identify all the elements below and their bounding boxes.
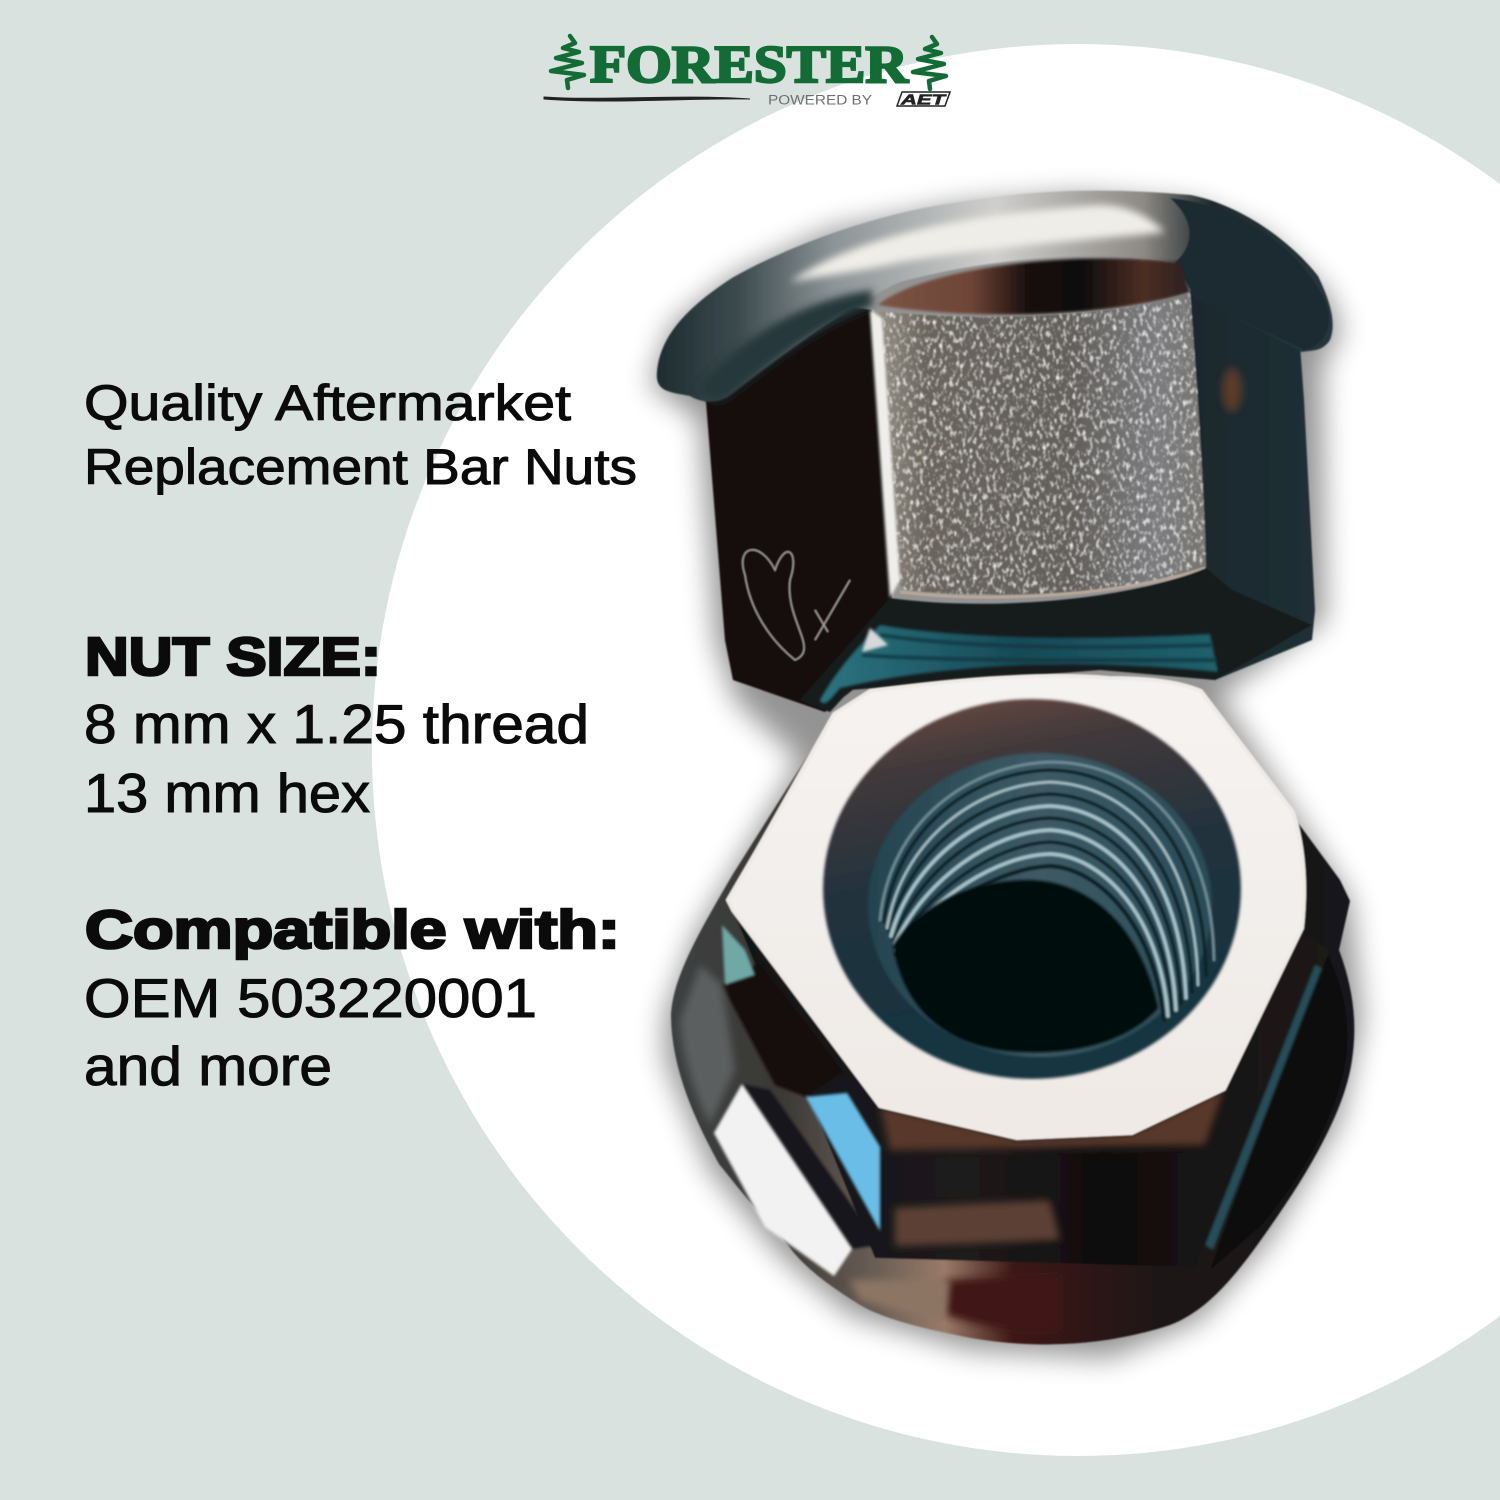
- bottom nut flange brown spot: [945, 1275, 1060, 1331]
- powered by: POWERED BY: [768, 92, 872, 108]
- text block: compatibility: [84, 900, 620, 1097]
- top nut right body: [1100, 290, 1315, 680]
- bottom nut threads: [880, 762, 1214, 1020]
- text block: nut size: 13 mm hex: [84, 762, 370, 824]
- bottom nut silver flange left: [680, 965, 735, 1125]
- top nut inner band under flange: [878, 259, 1190, 314]
- top nut flange dark right: [1170, 198, 1329, 350]
- top nut small highlight: [862, 628, 888, 652]
- top nut threaded throat: [820, 625, 1218, 703]
- bottom nut right teal edge: [1205, 965, 1322, 1250]
- text block: nut size: [84, 627, 589, 824]
- product photo: two flange nuts: [650, 191, 1362, 1358]
- bottom nut flange tan spot: [850, 1280, 950, 1320]
- text block: product heading: [84, 375, 637, 495]
- top nut lower chamfer: [800, 568, 1312, 712]
- logo swoosh underline: [544, 97, 750, 101]
- bottom nut brown lower reflection: [895, 1200, 1060, 1246]
- top nut flange rim: [657, 191, 1333, 402]
- bottom nut flange: [671, 691, 1354, 1344]
- top nut rust spot: [1222, 368, 1242, 412]
- bottom nut right flange dark: [1210, 950, 1348, 1270]
- top nut face lower edge line: [900, 568, 1205, 597]
- drop shadow: [650, 195, 1362, 1358]
- top nut flange highlight: [790, 205, 1165, 282]
- AET badge: AET: [900, 92, 948, 108]
- text block: compatibility: OEM 503220001: [84, 967, 537, 1029]
- icon: right pine tree: [913, 37, 946, 89]
- bottom nut black through-hole: [893, 880, 1158, 1052]
- bottom nut lower hex skirt: [733, 910, 1330, 1267]
- text block: product heading: Replacement Bar Nuts: [84, 439, 637, 495]
- text block: nut size: NUT SIZE:: [85, 627, 381, 687]
- top nut: [657, 191, 1333, 712]
- text block: compatibility: and more: [84, 1035, 332, 1097]
- logo: Forester: [544, 36, 950, 108]
- logo wordmark: FORESTER: [590, 36, 909, 94]
- white circle background: [372, 44, 1500, 1456]
- text block: product heading: Quality Aftermarket: [84, 375, 571, 431]
- top nut scratch marks: [743, 550, 850, 660]
- top nut left dark face: [660, 300, 892, 712]
- bottom nut white flange stripe: [714, 1084, 852, 1276]
- text block: nut size: 8 mm x 1.25 thread: [84, 693, 589, 755]
- bottom nut bright hex face: [728, 676, 1304, 1138]
- bottom nut thread wall: [868, 753, 1212, 1057]
- top nut flange teal underside: [700, 290, 872, 400]
- bottom nut dark left facet: [722, 962, 845, 1097]
- icon: left pine tree: [551, 36, 584, 88]
- bottom nut teal glint: [722, 925, 755, 985]
- bottom nut: [671, 676, 1354, 1344]
- bottom nut brown reflection: [880, 1089, 1224, 1150]
- top nut main grey face: [872, 293, 1206, 595]
- bottom nut blue highlight: [806, 1093, 880, 1231]
- top nut throat lines: [862, 635, 1216, 660]
- top nut face edge highlight: [870, 310, 900, 598]
- text block: compatibility: Compatible with:: [85, 900, 620, 960]
- bottom nut hole chamfer: [823, 699, 1241, 1079]
- AET badge: [897, 92, 950, 108]
- bottom nut dark groove: [742, 1084, 880, 1249]
